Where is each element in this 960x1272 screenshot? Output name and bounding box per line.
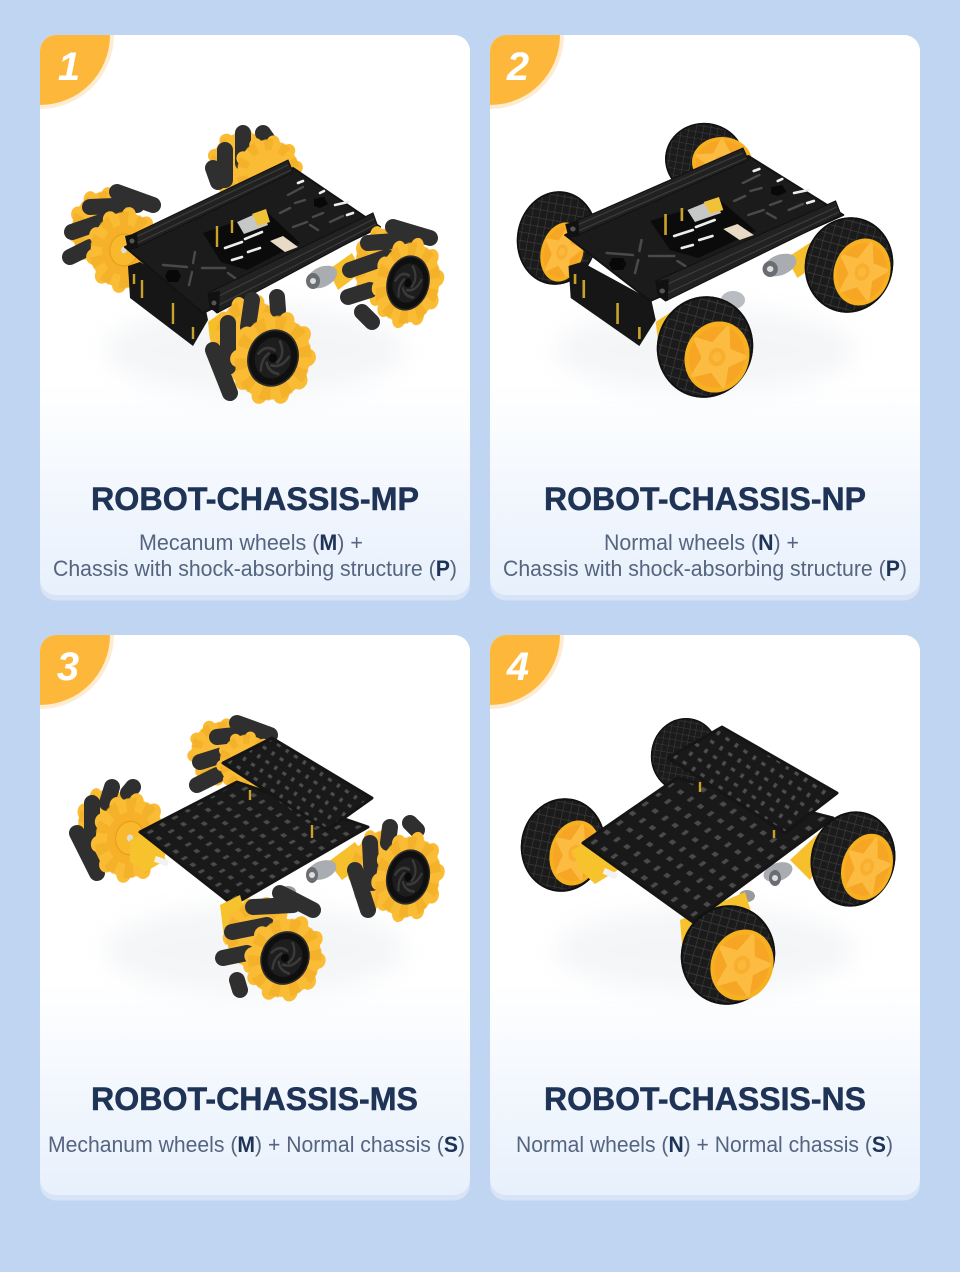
badge 3: 3 — [57, 645, 79, 689]
panel 1: ROBOT-CHASSIS-MP — [40, 35, 470, 600]
heading: ROBOT-CHASSIS-NS — [544, 1081, 866, 1117]
panel 3: ROBOT-CHASSIS-MS — [40, 635, 470, 1200]
badge 1: 1 — [58, 45, 80, 89]
badge 2: 2 — [506, 45, 529, 89]
robot photo: normal wheels with normal chassis — [512, 713, 906, 1015]
panel 4: ROBOT-CHASSIS-NS — [490, 635, 920, 1200]
description: Mechanum wheels (M) + Normal chassis (S) — [48, 1132, 465, 1157]
description: Normal wheels (N) + — [604, 530, 799, 555]
robot photo: normal wheels with shock-absorbing chassis — [509, 117, 904, 409]
robot photo: mecanum wheels with shock-absorbing chassis — [62, 128, 454, 418]
heading: ROBOT-CHASSIS-NP — [544, 481, 866, 517]
description: Chassis with shock-absorbing structure (P) — [53, 556, 457, 581]
heading: ROBOT-CHASSIS-MP — [91, 481, 419, 517]
description: Normal wheels (N) + Normal chassis (S) — [516, 1132, 893, 1157]
heading: ROBOT-CHASSIS-MS — [91, 1081, 418, 1117]
description: Mecanum wheels (M) + — [139, 530, 363, 555]
badge 3 — [40, 635, 114, 709]
description — [503, 530, 907, 581]
badge 1 — [40, 35, 114, 109]
robot photo: mecanum wheels with normal chassis — [67, 712, 454, 1016]
badge 4: 4 — [506, 645, 529, 689]
panel 2: ROBOT-CHASSIS-NP — [490, 35, 920, 600]
badge 2 — [490, 35, 564, 109]
description — [53, 530, 457, 581]
badge 4 — [490, 635, 564, 709]
description: Chassis with shock-absorbing structure (P) — [503, 556, 907, 581]
